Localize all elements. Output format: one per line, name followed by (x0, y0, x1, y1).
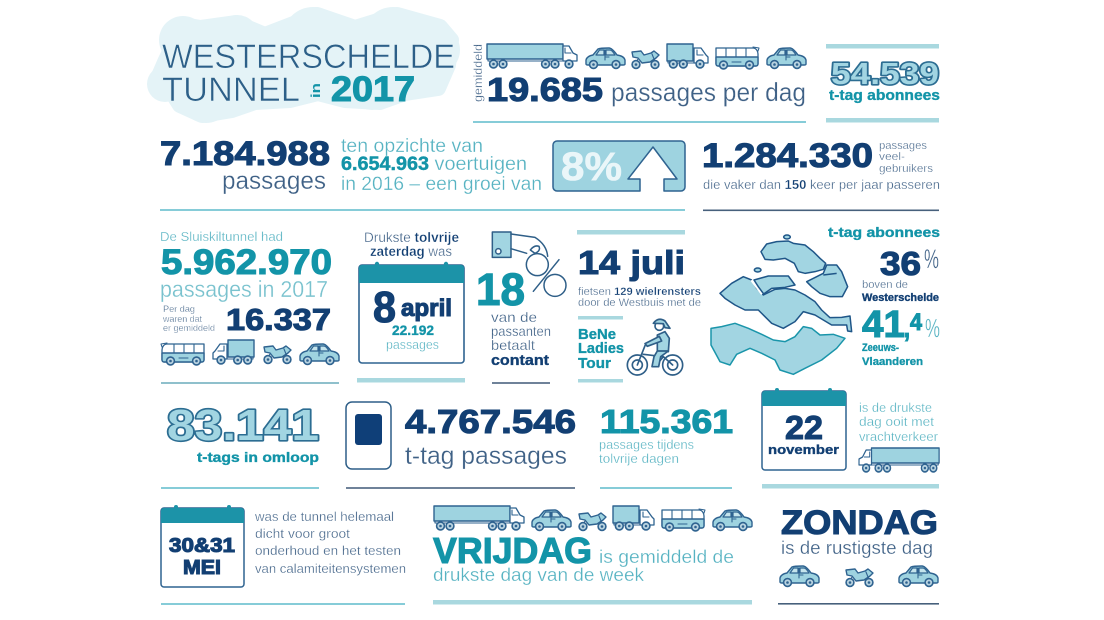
icon: hand with coin and percent sign (492, 232, 566, 296)
panel: vrijdag (433, 506, 752, 604)
icon: calendar 8 april (359, 262, 464, 363)
panel: passages per dag (471, 44, 806, 123)
panel: 18% contant: contant (491, 353, 549, 369)
panel: t-tag abonnees by region: % (925, 313, 940, 343)
panel: t-tag abonnees by region: Vlaanderen (862, 356, 923, 368)
panel: t-tag passages: t-tag passages (405, 442, 567, 470)
panel: veelgebruikers: die vaker dan 150 keer per jaar passeren (703, 178, 940, 192)
panel: 14 juli: fietsen 129 wielrensters (578, 286, 701, 298)
icon: calendar 30&31 mei: 30&31 (169, 535, 235, 557)
background cloud (147, 7, 460, 123)
panel: zondag: ZONDAG (781, 504, 938, 542)
panel: t-tag abonnees by region: t-tag abonnees (828, 224, 940, 240)
panel: t-tag abonnees by region: % (924, 244, 939, 274)
panel: 22 november: is de drukste (859, 400, 932, 415)
panel: 14 juli: 14 juli (578, 244, 685, 281)
panel: vrijdag: is gemiddeld de (599, 547, 734, 567)
icon: calendar 22 november: 22 (785, 409, 823, 446)
title: 2017 (331, 70, 415, 109)
panel: 18% contant: passanten (491, 323, 551, 339)
Zeeuws-Vlaanderen (711, 323, 845, 374)
panel: 18% contant: betaalt (491, 337, 535, 353)
panel: drukste tolvrije zaterdag: zaterdag was (370, 244, 452, 259)
panel: t-tag abonnees (826, 44, 940, 122)
panel: t-tag abonnees by region: Zeeuws- (862, 342, 899, 354)
icon: calendar 22 november (762, 388, 846, 470)
icon: calendar 30&31 mei (161, 505, 244, 587)
panel: tolvrije dagen (599, 403, 733, 489)
panel: Sluiskiltunnel (160, 229, 339, 384)
title: TUNNEL (162, 71, 300, 109)
panel: 22 november (762, 388, 939, 488)
panel: 22 november: vrachtverkeer (859, 429, 939, 444)
panel: 14 juli: door de Westbuis met de (578, 297, 701, 309)
panel: 30&31 mei: onderhoud en het testen (255, 544, 401, 558)
panel: totaal passages (160, 135, 685, 211)
Schouwen, Tholen and Beveland islands (720, 235, 852, 332)
panel: t-tag abonnees: t-tag abonnees (829, 87, 940, 104)
panel: veelgebruikers (702, 137, 940, 211)
title: in (308, 83, 323, 98)
icon: calendar 22 november: november (768, 443, 839, 457)
icon: 8% arrow box (553, 141, 685, 191)
panel: 30&31 mei: was de tunnel helemaal (254, 510, 394, 524)
panel: t-tag abonnees by region: boven de (862, 279, 908, 291)
panel: drukste tolvrije zaterdag (357, 230, 465, 382)
panel: veelgebruikers: gebruikers (879, 163, 934, 175)
panel: totaal passages: 7.184.988 (160, 135, 330, 173)
panel: zondag (778, 504, 939, 605)
panel: totaal passages: passages (222, 167, 326, 195)
panel: 18% contant: 18 (476, 264, 525, 315)
panel: t-tag abonnees by region: Westerschelde (862, 292, 939, 304)
panel: totaal passages: 6.654.963 voertuigen (341, 154, 527, 175)
panel: 14 juli: Ladies (578, 340, 624, 357)
panel: 18% contant (476, 232, 566, 384)
panel: t-tags in omloop: 83.141 (167, 401, 319, 450)
panel: Sluiskiltunnel: er gemiddeld (163, 323, 215, 334)
panel: t-tags in omloop: t-tags in omloop (197, 450, 319, 465)
map: Zeeland t-tag subscribers (711, 235, 852, 374)
panel: Sluiskiltunnel: De Sluiskiltunnel had (160, 229, 283, 244)
panel: t-tag abonnees by region: , (904, 313, 910, 343)
title: WESTERSCHELDE (162, 38, 455, 76)
panel: vrijdag: VRIJDAG (433, 530, 592, 571)
panel: passages per dag: 19.685 (487, 71, 603, 108)
panel: t-tag abonnees by region (828, 224, 940, 368)
panel: totaal passages: in 2016 – een groei van (341, 174, 542, 195)
icon: calendar 8 april: 22.192 (392, 322, 434, 338)
panel: tolvrije dagen: tolvrije dagen (599, 452, 679, 466)
icon: calendar 8 april: 8 (373, 283, 396, 332)
panel: t-tag abonnees by region: 4 (910, 309, 923, 336)
panel: 30&31 mei: van calamiteitensystemen (255, 562, 406, 576)
icon: calendar 30&31 mei: MEI (183, 557, 221, 579)
panel: tolvrije dagen: passages tijdens (599, 438, 694, 452)
panel: t-tag abonnees: 54.539 (831, 56, 939, 91)
panel: Sluiskiltunnel: waren dat (162, 314, 202, 325)
panel: 18% contant: van de (491, 309, 537, 325)
panel: totaal passages: ten opzichte van (341, 136, 483, 157)
panel: Sluiskiltunnel: Per dag (163, 304, 195, 315)
panel: 30&31 mei: dicht voor groot (255, 527, 351, 541)
panel: t-tag abonnees by region: 41 (862, 304, 905, 346)
icon: calendar 8 april: passages (386, 337, 439, 352)
panel: tolvrije dagen: 115.361 (600, 403, 733, 440)
title (162, 38, 455, 109)
panel: t-tags in omloop (161, 401, 319, 489)
icon: cyclist (627, 319, 683, 375)
icon: 8% arrow box: 8% (561, 145, 622, 189)
panel: veelgebruikers: veel- (879, 151, 905, 163)
panel: t-tag passages: 4.767.546 (405, 403, 576, 440)
panel: zondag: is de rustigste dag (781, 538, 933, 558)
panel: veelgebruikers: passages (879, 140, 928, 152)
panel: Sluiskiltunnel: passages in 2017 (160, 276, 328, 302)
panel: drukste tolvrije zaterdag: Drukste tolvrije (364, 230, 459, 245)
panel: 14 juli: BeNe (578, 326, 616, 343)
panel: passages per dag: gemiddeld (471, 44, 485, 102)
icon: t-tag (346, 402, 391, 469)
panel: passages per dag: passages per dag (611, 77, 806, 107)
panel: t-tag abonnees by region: 36 (880, 245, 921, 282)
panel: 14 juli (577, 230, 701, 382)
panel: 30&31 mei (161, 505, 406, 605)
panel: t-tag passages (346, 402, 576, 489)
icon: calendar 8 april: april (401, 295, 452, 322)
panel: veelgebruikers: 1.284.330 (702, 137, 873, 175)
panel: Sluiskiltunnel: 16.337 (226, 302, 331, 337)
panel: 14 juli: Tour (578, 355, 611, 372)
panel: 22 november: dag ooit met (859, 414, 934, 429)
panel: vrijdag: drukste dag van de week (433, 565, 645, 585)
panel: Sluiskiltunnel: 5.962.970 (161, 243, 332, 282)
